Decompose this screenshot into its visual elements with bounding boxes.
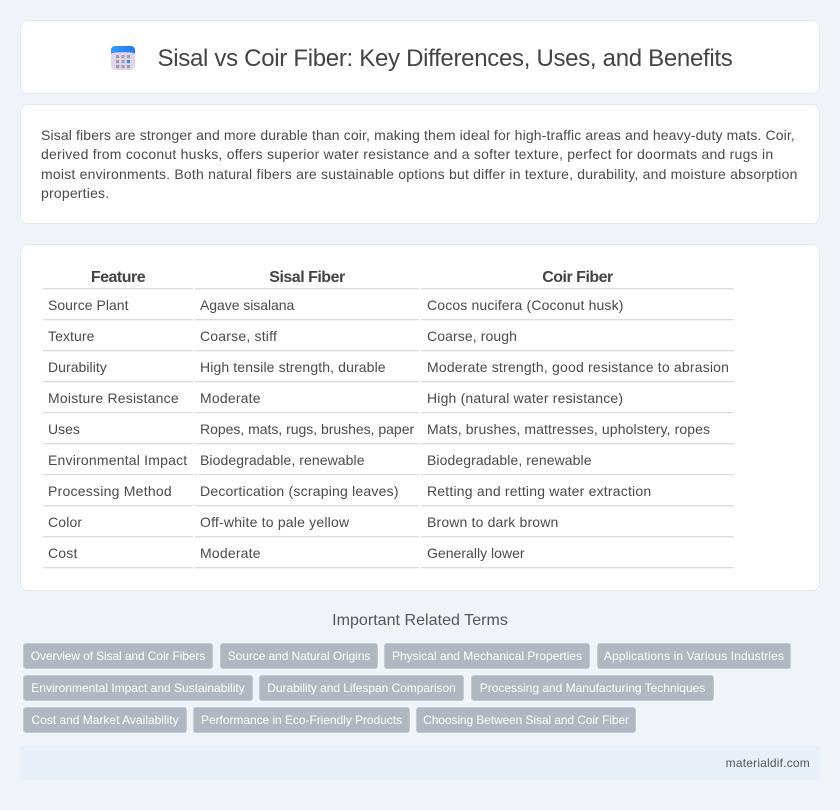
footer xyxy=(20,746,820,780)
related terms tags: Processing and Manufacturing Techniques xyxy=(480,681,705,695)
related terms tags: Applications in Various Industries xyxy=(604,649,784,663)
table row: Cost: Cost xyxy=(48,545,78,561)
panel: title header xyxy=(20,20,820,94)
related terms tags xyxy=(23,643,791,733)
table row: Environmental Impact: Environmental Impact xyxy=(48,452,187,468)
summary text: properties. xyxy=(41,185,109,201)
table row: Durability xyxy=(48,359,729,375)
table headers: Coir Fiber xyxy=(542,269,613,286)
table row: Texture: Texture xyxy=(48,328,95,344)
table row: Cost xyxy=(48,545,525,561)
table headers: Sisal Fiber xyxy=(269,269,345,286)
footer source: materialdif.com xyxy=(726,756,810,770)
table row: Color: Color xyxy=(48,514,82,530)
table row: Uses: Mats, brushes, mattresses, upholstery, ropes xyxy=(427,421,710,437)
table row: Uses xyxy=(48,421,710,437)
table row: Processing Method: Retting and retting water extraction xyxy=(427,483,651,499)
table row: Color xyxy=(48,514,558,530)
table row: Source Plant xyxy=(48,297,624,313)
summary text: derived from coconut husks, offers superior water resistance and a softer texture, perfect for doormats and rugs in xyxy=(41,146,773,162)
table row: Texture xyxy=(48,328,517,344)
table headers xyxy=(91,269,613,286)
table row: Environmental Impact: Biodegradable, renewable xyxy=(427,452,592,468)
table row: Durability: High tensile strength, durable xyxy=(200,359,386,375)
table row: Environmental Impact xyxy=(48,452,592,468)
summary text: moist environments. Both natural fibers are sustainable options but differ in texture, durability, and moisture absorption xyxy=(41,166,798,182)
table row: Moisture Resistance: Moisture Resistance xyxy=(48,390,179,406)
related terms tags: Source and Natural Origins xyxy=(228,649,370,663)
panel: comparison table xyxy=(20,244,820,591)
table row: Texture: Coarse, stiff xyxy=(200,328,277,344)
table row: Durability: Moderate strength, good resistance to abrasion xyxy=(427,359,729,375)
table row: Moisture Resistance xyxy=(48,390,623,406)
table row: Processing Method xyxy=(48,483,651,499)
related terms tags: Physical and Mechanical Properties xyxy=(392,649,582,663)
related terms tags: Performance in Eco-Friendly Products xyxy=(201,713,402,727)
heading: related terms: Important Related Terms xyxy=(332,612,508,629)
summary text xyxy=(41,127,798,201)
table row: Source Plant: Source Plant xyxy=(48,297,129,313)
table row: Source Plant: Agave sisalana xyxy=(200,297,294,313)
related terms tags: Environmental Impact and Sustainability xyxy=(31,681,245,695)
table row: Moisture Resistance: Moderate xyxy=(200,390,261,406)
table row: Processing Method: Decortication (scraping leaves) xyxy=(200,483,399,499)
related terms tags: Choosing Between Sisal and Coir Fiber xyxy=(423,713,629,727)
related terms tags: Durability and Lifespan Comparison xyxy=(267,681,456,695)
title: Sisal vs Coir Fiber: Key Differences, Uses, and Benefits xyxy=(158,45,732,72)
table row: Cost: Moderate xyxy=(200,545,261,561)
table row: Durability: Durability xyxy=(48,359,107,375)
table row: Color: Brown to dark brown xyxy=(427,514,558,530)
icon: calendar xyxy=(111,46,135,70)
table row: Color: Off-white to pale yellow xyxy=(200,514,349,530)
summary text: Sisal fibers are stronger and more durable than coir, making them ideal for high-traffic areas and heavy-duty mats. Coir, xyxy=(41,127,795,143)
table row: Uses: Uses xyxy=(48,421,80,437)
table row: Source Plant: Cocos nucifera (Coconut husk) xyxy=(427,297,624,313)
related terms tags: Cost and Market Availability xyxy=(31,713,179,727)
table row: Environmental Impact: Biodegradable, renewable xyxy=(200,452,365,468)
table row: Texture: Coarse, rough xyxy=(427,328,517,344)
table headers: Feature xyxy=(91,269,145,286)
table row: Moisture Resistance: High (natural water resistance) xyxy=(427,390,623,406)
related terms tags: Overview of Sisal and Coir Fibers xyxy=(31,649,205,663)
panel: summary xyxy=(20,104,820,224)
table row: Uses: Ropes, mats, rugs, brushes, paper xyxy=(200,421,414,437)
table row: Processing Method: Processing Method xyxy=(48,483,172,499)
table row: Cost: Generally lower xyxy=(427,545,525,561)
